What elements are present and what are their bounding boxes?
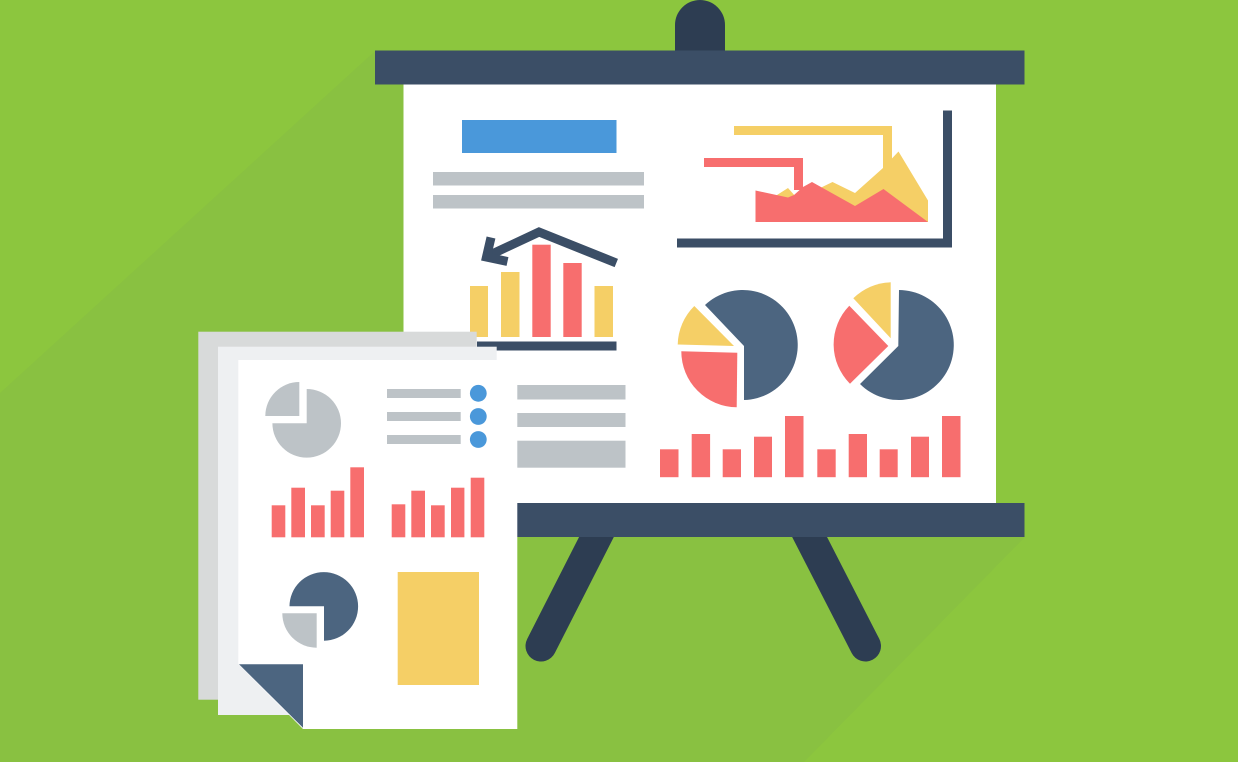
legend dots bbox=[470, 385, 487, 448]
report document bbox=[198, 332, 517, 729]
navy slice bbox=[705, 290, 798, 400]
pie chart right bbox=[834, 282, 954, 400]
legend list bbox=[387, 385, 487, 448]
arrow bbox=[486, 232, 616, 263]
top bar bbox=[375, 50, 1024, 84]
grey pie chart bbox=[265, 382, 341, 458]
top knob bbox=[675, 0, 725, 52]
navy slice bbox=[860, 290, 954, 400]
front sheet bbox=[238, 360, 517, 729]
yellow slice bbox=[678, 306, 734, 346]
yellow slice bbox=[853, 282, 891, 338]
report bar chart right bbox=[392, 478, 484, 537]
middle sheet bbox=[218, 347, 497, 715]
yellow series line bbox=[734, 126, 892, 172]
back sheet bbox=[198, 332, 477, 700]
legend lines bbox=[387, 389, 461, 444]
red bars bbox=[532, 245, 582, 337]
folded corner bbox=[239, 664, 303, 728]
bar chart with arrow bbox=[470, 232, 616, 350]
red series line bbox=[704, 158, 803, 190]
bottom bar bbox=[375, 503, 1024, 537]
area chart bbox=[677, 110, 952, 248]
navy slice bbox=[290, 572, 358, 641]
text lines right of report bbox=[517, 385, 626, 468]
report bar chart left bbox=[272, 467, 364, 537]
presentation board bbox=[375, 0, 1024, 646]
report pie chart bbox=[282, 572, 358, 648]
long shadow bbox=[0, 51, 1025, 762]
yellow area bbox=[777, 152, 928, 222]
red slice bbox=[681, 351, 737, 407]
yellow bars bbox=[470, 272, 613, 337]
grey slice bbox=[282, 613, 317, 648]
wide bar chart bbox=[660, 416, 960, 477]
yellow block bbox=[398, 572, 479, 685]
baseline bbox=[477, 342, 616, 350]
red area bbox=[756, 182, 928, 222]
text lines top bbox=[433, 172, 644, 208]
chart axes bbox=[677, 110, 952, 248]
screen bbox=[404, 80, 996, 508]
pie chart left bbox=[678, 290, 798, 407]
red slice bbox=[834, 306, 888, 384]
blue heading block bbox=[462, 120, 616, 153]
easel legs bbox=[541, 530, 866, 646]
